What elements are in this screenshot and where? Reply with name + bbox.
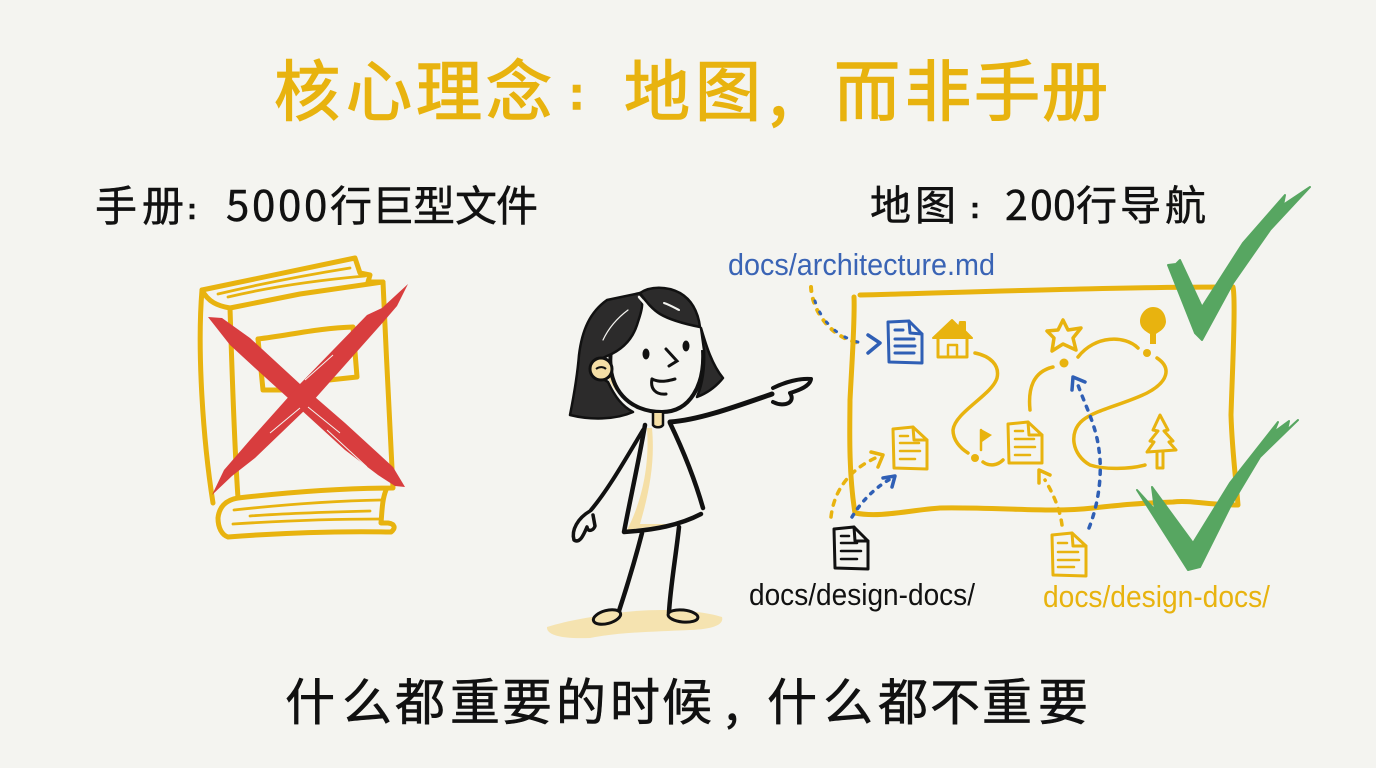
heading: map: 地图: [870, 172, 956, 232]
heading: map: 行导航: [1076, 172, 1206, 232]
heading: manual: 行巨型文件: [330, 173, 538, 234]
route waypoints: [971, 349, 1151, 462]
neck: [653, 413, 663, 427]
icon: star: [1047, 320, 1081, 351]
book outline: [200, 258, 394, 537]
icon: yellow document 3: [1052, 533, 1086, 576]
icon: green check top: [1168, 187, 1310, 340]
arrow: blue dotted route: [1072, 377, 1100, 528]
heading: map: :: [970, 192, 980, 225]
nose and mouth: [652, 349, 677, 394]
arrows: black document to map: [831, 452, 895, 517]
heading: manual: :: [187, 193, 197, 226]
icon: blue document: [888, 321, 922, 363]
dress shadow: [627, 428, 672, 530]
title: 地图: [624, 39, 761, 135]
label: docs/design-docs black: docs/design-docs/: [749, 577, 975, 612]
label: docs/design-docs yellow: docs/design-docs/: [1043, 579, 1270, 614]
ear: [590, 358, 612, 380]
feet: [592, 607, 699, 627]
dress and limbs: [573, 379, 811, 614]
icon: crossed-out book: [200, 258, 408, 537]
book pages: [218, 268, 381, 524]
icon: map pin: [1140, 307, 1166, 344]
ground shadow: [547, 610, 722, 638]
title: 核心理念: [274, 39, 552, 135]
icon: black document: [834, 527, 868, 569]
red cross: [208, 284, 408, 495]
heading: manual: 5000: [226, 173, 327, 234]
heading: manual: 手册: [95, 173, 184, 234]
head: [610, 350, 703, 412]
eyes: [642, 340, 690, 360]
arrow: architecture link: [811, 287, 880, 353]
icon: pine tree: [1147, 415, 1176, 468]
hair highlights: [603, 297, 679, 340]
icon: green check bottom: [1137, 420, 1298, 570]
bottom caption: 什么都重要的时候,什么都不重要: [285, 663, 1088, 735]
title: ,: [769, 39, 787, 135]
character: pointing girl: [547, 288, 811, 638]
label: docs/architecture.md: docs/architecture.md: [728, 247, 995, 282]
heading: map: 200: [1005, 172, 1076, 232]
icon: flag: [981, 429, 992, 450]
title: 而非手册: [834, 39, 1108, 135]
hair: [570, 288, 723, 418]
arrow: yellow document to map: [1039, 470, 1062, 525]
face shadow: [606, 365, 666, 410]
map frame: [850, 287, 1238, 515]
title: :: [569, 67, 584, 119]
map route: [953, 339, 1166, 468]
icon: yellow document 1: [893, 427, 927, 469]
icon: yellow document 2: [1008, 422, 1042, 463]
icon: home: [933, 320, 972, 357]
